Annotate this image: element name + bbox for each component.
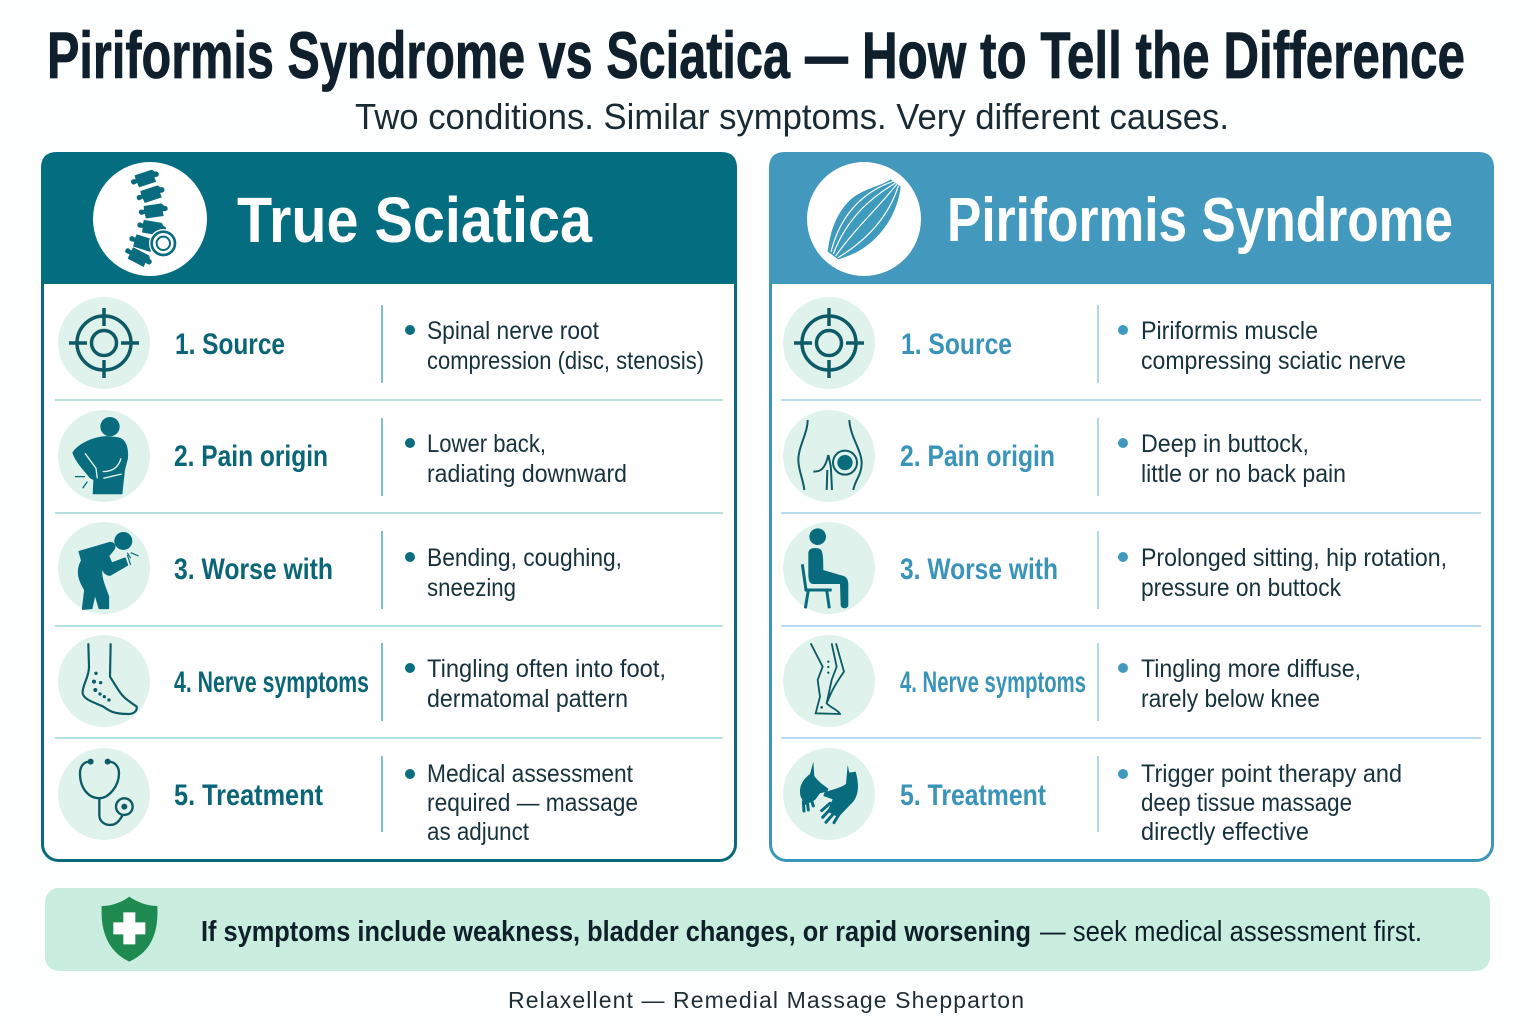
row 3: worse with [783,522,1447,614]
description: Tingling more diffuse, [1141,655,1361,683]
label: 4. Nerve symptoms [900,666,1086,699]
description [405,317,704,375]
description: rarely below knee [1141,685,1320,713]
label: 4. Nerve symptoms [174,666,369,699]
label: 5. Treatment [174,779,323,812]
description: pressure on buttock [1141,574,1341,602]
description: Tingling often into foot, [427,655,666,683]
header: Piriformis Syndrome [769,152,1494,284]
label: 2. Pain origin [900,440,1055,473]
description: radiating downward [427,460,627,488]
subtitle: Two conditions. Similar symptoms. Very different causes. [355,96,1229,137]
icon: legs [783,635,875,727]
row 1: source [58,297,704,389]
icon: foot [58,635,150,727]
row 1: source [783,297,1406,389]
icon: target [783,297,875,389]
title: Piriformis Syndrome vs Sciatica [47,18,791,92]
label: 3. Worse with [900,553,1058,586]
title: — [805,18,848,92]
icon: shield [102,897,157,962]
row 2: pain origin [58,410,627,502]
row 4: nerve symptoms [783,635,1361,727]
row dividers [781,400,1481,738]
label: 2. Pain origin [174,440,328,473]
row 3: worse with [58,522,622,614]
description: required — massage [427,789,638,817]
description: Spinal nerve root [427,317,599,345]
description [1118,655,1361,713]
description: Lower back, [427,430,546,458]
row dividers [55,400,723,738]
callout text: — seek medical assessment first. [1040,916,1422,948]
label: 1. Source [175,328,285,361]
label: 5. Treatment [900,779,1046,812]
description: compression (disc, stenosis) [427,347,704,375]
panel: Piriformis Syndrome [769,152,1494,860]
description: Piriformis muscle [1141,317,1318,345]
icon: person holding lower back [58,410,150,502]
footer: Relaxellent — Remedial Massage Shepparton [508,987,1024,1013]
description [1118,317,1406,375]
description [1118,430,1346,488]
description [405,760,638,846]
callout text: If symptoms include weakness, bladder changes, or rapid worsening [201,916,1031,948]
description: Prolonged sitting, hip rotation, [1141,544,1447,572]
description [1118,544,1447,602]
description: sneezing [427,574,516,602]
description: as adjunct [427,818,529,846]
description [1118,760,1402,846]
description: Bending, coughing, [427,544,622,572]
header text: True Sciatica [237,184,592,256]
row 2: pain origin [783,410,1346,502]
header: True Sciatica [41,152,737,284]
description: Medical assessment [427,760,633,788]
label: 1. Source [901,328,1012,361]
row 5: treatment [58,748,638,846]
description: deep tissue massage [1141,789,1352,817]
panel: True Sciatica [41,152,737,860]
description [405,544,622,602]
icon: target [58,297,150,389]
description: dermatomal pattern [427,685,628,713]
callout: safety warning [45,888,1490,971]
description: Deep in buttock, [1141,430,1309,458]
label: 3. Worse with [174,553,333,586]
description: little or no back pain [1141,460,1346,488]
icon: massage hands [783,748,875,840]
description: Trigger point therapy and [1141,760,1402,788]
description: directly effective [1141,818,1309,846]
icon: person sitting [783,522,875,614]
description [405,430,627,488]
icon: buttock with target [783,410,875,502]
description: compressing sciatic nerve [1141,347,1406,375]
icon: muscle [807,162,921,276]
icon: person coughing [58,522,150,614]
row 5: treatment [783,748,1402,846]
description [405,655,666,713]
row 4: nerve symptoms [58,635,666,727]
icon: spine [93,162,207,276]
icon: stethoscope [58,748,150,840]
